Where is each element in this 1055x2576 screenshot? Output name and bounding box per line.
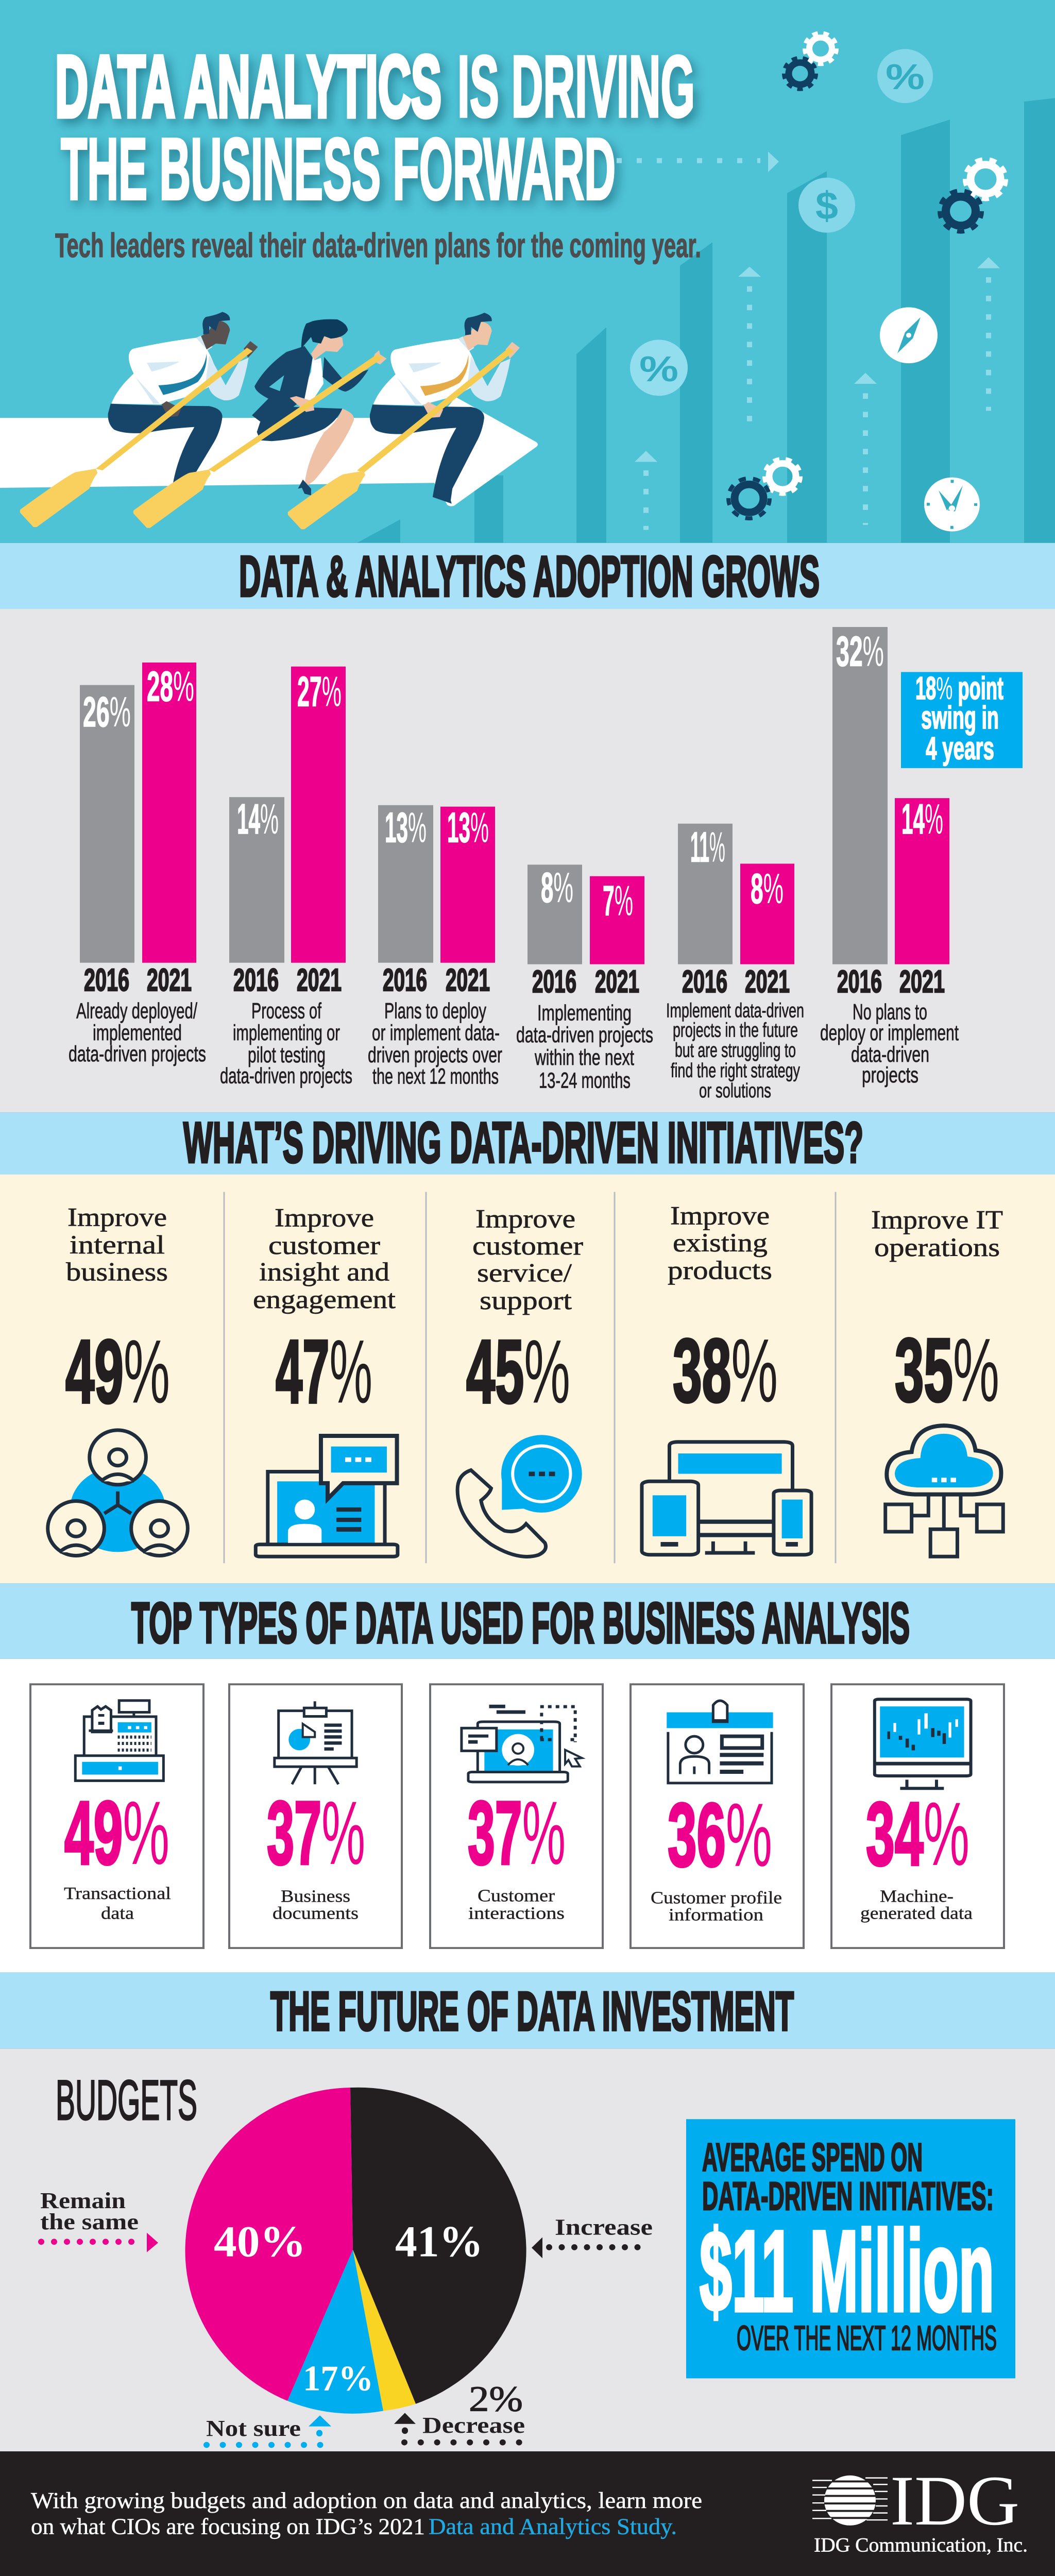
driver: existing products: products	[668, 1256, 772, 1285]
bar group: next 12 months: the next 12 months	[372, 1064, 499, 1089]
bar group: pilot testing: data-driven projects	[220, 1064, 352, 1089]
bar group: already deployed: Already deployed/	[76, 999, 198, 1023]
bar group: struggling: or solutions	[699, 1079, 771, 1102]
bar group: no plans: data-driven	[851, 1043, 929, 1067]
rower 1	[20, 312, 258, 527]
label: remain the same	[40, 2188, 158, 2252]
logo: IDG	[812, 2462, 1028, 2556]
icon: phone with bubble	[457, 1435, 582, 1556]
bar group: pilot testing: 2016	[233, 963, 279, 998]
white arrow	[0, 397, 538, 506]
icon: percent badge lower: %	[639, 349, 678, 389]
icon: cash register	[75, 1701, 163, 1781]
label: increase	[532, 2214, 653, 2258]
bar group: 13-24 months: Implementing	[537, 1001, 632, 1025]
callout: 18% point swing	[901, 671, 1023, 768]
bar group: next 12 months: 13%	[385, 804, 427, 851]
bar group: next 12 months: 13%	[447, 804, 489, 851]
driver: internal business	[48, 1203, 188, 1555]
arrow: dotted right	[617, 151, 779, 172]
bar group: already deployed: 26%	[83, 688, 131, 736]
driver: customer service: customer	[472, 1232, 583, 1261]
bar group: 13-24 months: 2021	[595, 964, 639, 999]
card: customer interactions: interactions	[468, 1904, 565, 1923]
bar group: no plans	[820, 627, 959, 1088]
heading: budgets: BUDGETS	[56, 2069, 197, 2132]
panel: footer	[0, 2451, 1055, 2576]
icon: ID badge	[667, 1701, 773, 1783]
icon: percent badge lower	[630, 340, 688, 396]
driver: customer insight: engagement	[253, 1285, 396, 1314]
driver: IT operations: 35%	[895, 1319, 999, 1420]
bar group: 13-24 months: 13-24 months	[539, 1069, 631, 1093]
label: not sure: Not sure	[206, 2416, 301, 2441]
icon: clock	[924, 478, 980, 531]
arrow: dotted up B	[854, 373, 877, 525]
bar group: no plans: deploy or implement	[820, 1021, 959, 1045]
driver: internal business: business	[66, 1258, 168, 1286]
icon: laptop with profile	[462, 1705, 582, 1782]
title: DATA ANALYTICS	[55, 38, 441, 135]
driver: customer service	[457, 1205, 583, 1556]
panel: adoption chart	[0, 609, 1055, 1112]
callout: average spend	[686, 2119, 1015, 2378]
driver: customer insight: insight and	[259, 1258, 389, 1286]
bar group: already deployed: data-driven projects	[69, 1042, 206, 1066]
bar group: pilot testing: Process of	[251, 999, 322, 1023]
bar group: struggling: Implement data-driven	[666, 999, 804, 1022]
arrow: dotted up C	[977, 257, 1000, 411]
driver: existing products: Improve	[670, 1201, 770, 1230]
card: customer profile: 36%	[668, 1784, 772, 1885]
card: customer profile: information	[669, 1905, 763, 1925]
bar group: next 12 months: Plans to deploy	[384, 999, 486, 1023]
callout: 18% point swing: swing in	[921, 700, 999, 736]
label: remain the same: Remain	[40, 2188, 126, 2213]
bar group: already deployed: implemented	[93, 1021, 182, 1045]
driver: existing products: existing	[673, 1229, 768, 1258]
card: customer profile	[631, 1684, 804, 1948]
panel: hero: IS DRIVING	[457, 38, 695, 135]
driver: existing products	[642, 1201, 811, 1555]
driver: customer insight: customer	[268, 1231, 380, 1260]
card: business documents	[229, 1684, 402, 1948]
bar group: 13-24 months: 2016	[532, 964, 576, 999]
driver: IT operations	[871, 1206, 1003, 1556]
bar group: 13-24 months: within the next	[534, 1045, 634, 1070]
bar group: no plans: 14%	[901, 795, 943, 843]
card: machine-generated: generated data	[860, 1904, 973, 1923]
bar group: struggling	[666, 823, 804, 1102]
illustration: rowers on arrow	[0, 312, 538, 529]
label: increase: Increase	[555, 2214, 653, 2240]
bar group: no plans: 32%	[836, 628, 884, 675]
driver: customer service: Improve	[475, 1205, 575, 1233]
icon: percent badge top	[877, 49, 933, 103]
chart bars background	[357, 98, 1055, 543]
card: business documents: documents	[273, 1904, 359, 1923]
driver: customer insight: Improve	[275, 1204, 374, 1232]
bar group: pilot testing	[220, 667, 352, 1089]
bar group: 13-24 months	[516, 863, 653, 1093]
footer text: on what CIOs are focusing on IDG’s 2021	[31, 2514, 425, 2539]
icon: percent badge top: %	[886, 57, 925, 97]
card: machine-generated: 34%	[866, 1783, 969, 1884]
bar group: struggling: 8%	[751, 865, 784, 912]
icon: cloud network	[886, 1426, 1003, 1556]
driver: IT operations: Improve IT	[871, 1206, 1003, 1234]
bar group: no plans: 2016	[837, 964, 882, 999]
panel: hero	[0, 0, 1055, 543]
bar group: struggling: 11%	[690, 823, 725, 871]
icon: three people network	[48, 1430, 188, 1555]
card: customer profile: Customer profile	[651, 1888, 782, 1908]
logo: IDG: IDG Communication, Inc.	[814, 2534, 1028, 2556]
icon: dollar badge: $	[815, 184, 838, 228]
callout: 18% point swing: 18% point	[915, 671, 1003, 706]
footer text	[31, 2487, 702, 2539]
card: transactional	[30, 1684, 203, 1948]
logo: IDG: IDG	[890, 2462, 1019, 2540]
driver: existing products: 38%	[673, 1320, 778, 1421]
card: customer interactions: Customer	[478, 1886, 555, 1906]
icon: gears top	[784, 33, 837, 89]
rower 2	[133, 319, 387, 528]
card: business documents: 37%	[267, 1782, 365, 1883]
bar group: already deployed: 2016	[84, 963, 129, 998]
card: transactional: Transactional	[64, 1884, 171, 1903]
title	[55, 38, 695, 218]
card: machine-generated: Machine-	[880, 1887, 954, 1906]
card: transactional: data	[101, 1904, 134, 1923]
card: customer interactions	[430, 1684, 603, 1948]
icon: devices	[642, 1442, 811, 1555]
panel: investment	[0, 2048, 1055, 2451]
bar group: struggling: projects in the future	[673, 1019, 798, 1041]
bar group: next 12 months	[368, 804, 502, 1089]
pie chart: budgets	[185, 2088, 526, 2414]
callout: 18% point swing: 4 years	[926, 731, 994, 766]
driver: customer service: support	[480, 1286, 572, 1315]
driver: internal business: Improve	[67, 1203, 167, 1232]
driver: customer service: 45%	[466, 1321, 570, 1422]
arrow: dotted up A	[738, 267, 761, 421]
icon: gears right	[940, 159, 1006, 232]
bar group: already deployed	[69, 663, 206, 1066]
card: customer interactions: 37%	[468, 1782, 566, 1883]
bar group: already deployed: 28%	[147, 663, 194, 710]
section band: data types	[0, 1583, 1055, 1659]
rower 3	[288, 313, 520, 529]
bar group: pilot testing: pilot testing	[248, 1043, 326, 1067]
pie chart: budgets: 17%	[303, 2359, 373, 2398]
section band: investment	[0, 1973, 1055, 2048]
bar group: 13-24 months: 7%	[603, 877, 633, 924]
bar group: struggling: 2016	[682, 964, 727, 999]
panel: drivers	[0, 1175, 1055, 1583]
icon: gears bottom	[728, 459, 801, 518]
bar group: 13-24 months: data-driven projects	[516, 1023, 653, 1047]
card: machine-generated	[831, 1684, 1004, 1948]
driver: customer insight: 47%	[276, 1321, 372, 1422]
card: business documents: Business	[281, 1887, 350, 1906]
card: transactional: 49%	[64, 1782, 169, 1883]
icon: dollar badge	[798, 178, 855, 233]
bar group: 13-24 months: 8%	[541, 863, 573, 911]
bar group: pilot testing: 2021	[297, 963, 342, 998]
bar group: no plans: No plans to	[853, 1000, 927, 1024]
bar group: struggling: but are struggling to	[675, 1039, 796, 1061]
bar group: already deployed: 2021	[147, 963, 192, 998]
bar group: no plans: projects	[862, 1063, 918, 1088]
bar group: no plans: 2021	[899, 964, 945, 999]
bar group: next 12 months: driven projects over	[368, 1043, 502, 1067]
icon: monitor with chart	[875, 1699, 971, 1788]
bar group: next 12 months: or implement data-	[372, 1021, 500, 1045]
driver: internal business: internal	[70, 1231, 165, 1260]
driver: IT operations: operations	[874, 1233, 1000, 1262]
bar group: pilot testing: 14%	[237, 795, 279, 843]
pie chart: budgets: 41%	[395, 2217, 483, 2266]
bar group: pilot testing: 27%	[297, 668, 342, 715]
bar group: next 12 months: 2021	[446, 963, 490, 998]
driver: customer insight	[253, 1204, 398, 1556]
panel: data types	[0, 1659, 1055, 1973]
icon: compass	[880, 307, 938, 363]
label: decrease 2%	[394, 2379, 525, 2443]
bar group: next 12 months: 2016	[383, 963, 427, 998]
footer text: With growing budgets and adoption on data and analytics, learn more	[31, 2487, 702, 2513]
label: decrease 2%: 2%	[469, 2379, 523, 2419]
bar group: pilot testing: implementing or	[233, 1021, 340, 1045]
icon: presentation board	[275, 1701, 356, 1784]
arrow: dotted up D	[635, 451, 657, 530]
section band: adoption	[0, 543, 1055, 609]
footer text: Data and Analytics Study.	[429, 2514, 677, 2539]
bar group: struggling: 2021	[745, 964, 790, 999]
section band: drivers	[0, 1111, 1055, 1175]
label: decrease 2%: Decrease	[422, 2413, 525, 2438]
icon: laptop with speech bubble	[256, 1436, 398, 1556]
label: not sure	[206, 2415, 331, 2445]
driver: internal business: 49%	[65, 1321, 170, 1422]
pie chart: budgets: 40%	[214, 2217, 306, 2266]
driver: customer service: service/	[477, 1259, 572, 1287]
bar group: struggling: find the right strategy	[671, 1060, 800, 1082]
label: remain the same: the same	[40, 2209, 139, 2234]
